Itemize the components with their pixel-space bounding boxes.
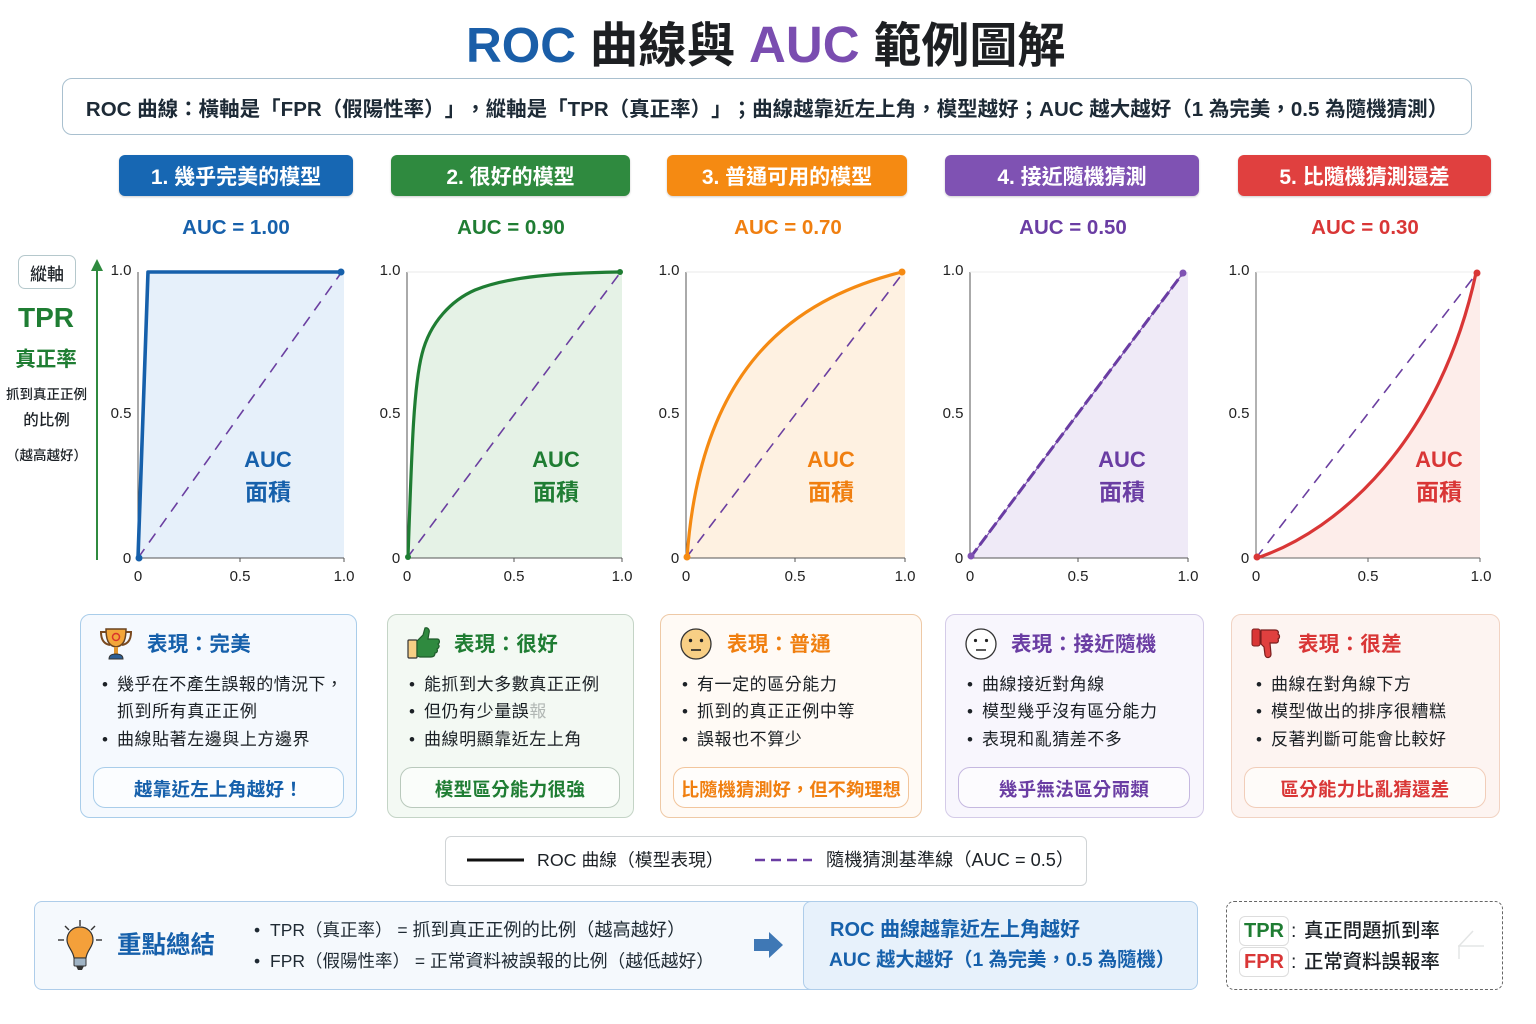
FPR badge: FPR [1244,950,1284,972]
chart 3 [659,262,915,585]
summary heading: 重點總結 [117,932,215,959]
chart 2 [380,262,632,585]
performance bullets 1: • [102,730,108,749]
summary definitions: TPR（真正率） = 抓到真正正例的比例（越高越好） [270,920,685,940]
FPR meaning: 正常資料誤報率 [1304,951,1440,973]
chart 4 [943,262,1198,585]
takeaway 1 [93,767,344,808]
chart 1: 0.5 [111,405,131,422]
TPR note: （越高越好） [6,448,87,463]
performance bullets 2: • [409,730,415,749]
performance bullets 1: 幾乎在不產生誤報的情況下， [117,675,343,694]
chart 5: AUC [1415,447,1463,472]
AUC value 3: AUC = 0.70 [734,216,842,239]
chart 2: 0 [403,568,411,585]
performance bullets 2 [409,675,600,749]
icon: light bulb [58,920,102,970]
legend [445,836,1087,886]
FPR badge [1239,947,1289,977]
performance bullets 1: 抓到所有真正正例 [117,702,257,721]
conclusion box [803,901,1198,990]
TPR meaning: 真正問題抓到率 [1304,920,1440,942]
title: ROC 曲線與 AUC 範例圖解 [466,16,1065,73]
model heading 4: 4. 接近隨機猜測 [997,166,1147,188]
takeaway 3 [673,767,909,808]
performance heading 1: 表現：完美 [147,633,251,656]
performance heading 2: 表現：很好 [454,633,558,656]
panel: worse-than-random model [1231,614,1500,818]
performance bullets 4: • [967,702,973,721]
TPR badge: TPR [1244,920,1284,942]
summary definitions [254,920,714,971]
chart 2: 1.0 [380,262,400,279]
faint arrow mark [1458,930,1484,959]
chart 5: 1.0 [1229,262,1249,279]
takeaway 4: 幾乎無法區分兩類 [999,778,1149,800]
takeaway 2: 模型區分能力很強 [435,778,585,800]
performance bullets 3: 誤報也不算少 [697,730,802,749]
icon: neutral outline face [965,628,997,660]
chart 5: 1.0 [1471,568,1491,585]
TPR label: TPR [18,302,74,333]
takeaway 2 [400,767,620,808]
takeaway 5 [1244,767,1486,808]
performance bullets 5: 曲線在對角線下方 [1271,675,1411,694]
chart 4: 面積 [1099,479,1145,505]
axis tag [18,255,76,289]
panel: near-random model [945,614,1204,818]
panel: perfect model [80,614,357,818]
performance bullets 5: 模型做出的排序很糟糕 [1271,702,1446,721]
chart 4: 0.5 [943,405,963,422]
legend: ROC line [467,858,524,862]
legend: baseline label: 隨機猜測基準線（AUC = 0.5） [826,850,1074,870]
axis tag: 縱軸 [30,264,64,284]
FPR meaning: : [1291,951,1296,973]
TPR description second line: 的比例 [23,412,70,429]
performance bullets 3: • [682,730,688,749]
icon: neutral face [680,628,712,660]
performance bullets 2: 曲線明顯靠近左上角 [424,730,582,749]
performance heading 4: 表現：接近隨機 [1011,633,1157,656]
AUC value 1: AUC = 1.00 [182,216,290,239]
takeaway 3: 比隨機猜測好，但不夠理想 [681,780,901,800]
intro definition box: ROC 曲線：橫軸是「FPR（假陽性率）」，縱軸是「TPR（真正率）」；曲線越靠近左上角，模型越好；AUC 越大越好（1 為完美，0.5 為隨機猜測） [86,98,1448,120]
model heading 1 [119,155,353,196]
performance bullets 1 [102,675,343,749]
panel: good model [387,614,634,818]
arrow [754,932,783,958]
conclusion line 2: AUC 越大越好（1 為完美，0.5 為隨機） [829,950,1175,971]
icon: thumbs down [1252,628,1280,658]
summary definitions: • [254,951,260,971]
takeaway 4 [958,767,1190,808]
takeaway 1: 越靠近左上角越好！ [134,778,303,800]
chart 3: AUC [807,447,855,472]
chart 2: 面積 [533,479,579,505]
performance bullets 5: • [1256,730,1262,749]
model heading 2 [391,155,630,196]
performance heading 3: 表現：普通 [727,633,831,656]
chart 3: 面積 [808,479,854,505]
model heading 5: 5. 比隨機猜測還差 [1279,166,1450,188]
legend: ROC label: ROC 曲線（模型表現） [537,850,724,870]
chart 1: 0 [134,568,142,585]
chart 4: 0 [966,568,974,585]
summary panel [34,901,824,990]
panel: average model [660,614,922,818]
model heading 4 [945,155,1199,196]
model heading 3 [667,155,907,196]
chart 1 [111,262,354,585]
TPR description: 抓到真正正例 [6,387,87,402]
chart 2: AUC [532,447,580,472]
chart 3: 0.5 [785,568,805,585]
performance bullets 5 [1256,675,1446,749]
performance bullets 4: • [967,730,973,749]
performance bullets 4: 模型幾乎沒有區分能力 [982,702,1158,721]
conclusion line 1: ROC 曲線越靠近左上角越好 [830,919,1080,941]
y-axis arrow [91,259,103,560]
y-axis explanation [6,255,103,560]
AUC value 5: AUC = 0.30 [1311,216,1419,239]
intro definition box [62,78,1472,135]
TPR badge [1239,916,1289,946]
chart 4: 1.0 [1178,568,1198,585]
chart 5: 0 [1241,550,1249,567]
glossary box [1226,901,1503,990]
icon: trophy [100,628,132,660]
performance bullets 1: 曲線貼著左邊與上方邊界 [117,730,310,749]
chart 3: 0 [671,550,679,567]
charts [111,262,1491,585]
chart 3: 1.0 [895,568,915,585]
chart 4: 0 [955,550,963,567]
performance bullets 4 [967,675,1158,749]
performance bullets 3: • [682,702,688,721]
performance bullets 2: • [409,675,415,694]
performance bullets 3: 有一定的區分能力 [697,675,837,694]
model heading 1: 1. 幾乎完美的模型 [151,166,321,188]
chart 1: AUC [244,447,292,472]
performance bullets 4: 表現和亂猜差不多 [982,730,1122,749]
chart 1: 1.0 [334,568,354,585]
chart 5: 0.5 [1229,405,1249,422]
chart 2: 0.5 [504,568,524,585]
performance bullets 5: 反著判斷可能會比較好 [1271,730,1446,749]
performance bullets 1: • [102,675,108,694]
AUC value 4: AUC = 0.50 [1019,216,1127,239]
chart 4: 0.5 [1068,568,1088,585]
icon: thumbs up [407,627,440,659]
chart 5: 0 [1252,568,1260,585]
performance bullets 3: • [682,675,688,694]
TPR Chinese name: 真正率 [15,348,77,371]
performance bullets 5: • [1256,702,1262,721]
chart 3: 0 [682,568,690,585]
chart 2: 1.0 [612,568,632,585]
chart 5: 0.5 [1358,568,1378,585]
chart 1: 1.0 [111,262,131,279]
performance bullets 2: • [409,702,415,721]
model heading 2: 2. 很好的模型 [446,166,575,188]
chart 1: 0.5 [230,568,250,585]
chart 4: 1.0 [943,262,963,279]
chart 1: 0 [123,550,131,567]
performance bullets 3: 抓到的真正正例中等 [697,702,855,721]
AUC value 2: AUC = 0.90 [457,216,565,239]
chart 2: 0 [392,550,400,567]
chart 3: 0.5 [659,405,679,422]
TPR meaning: : [1291,920,1296,942]
takeaway 5: 區分能力比亂猜還差 [1280,778,1450,800]
chart 4: AUC [1098,447,1146,472]
chart 3: 1.0 [659,262,679,279]
performance bullets 3 [682,675,855,749]
performance bullets 5: • [1256,675,1262,694]
performance bullets 4: • [967,675,973,694]
chart 1: 面積 [245,479,291,505]
model heading 5 [1238,155,1491,196]
performance bullets 2: 能抓到大多數真正正例 [424,675,600,694]
performance heading 5: 表現：很差 [1298,633,1402,656]
summary definitions: • [254,920,260,940]
performance bullets 2: 但仍有少量誤報 [424,702,547,721]
chart 2: 0.5 [380,405,400,422]
summary definitions: FPR（假陽性率） = 正常資料被誤報的比例（越低越好） [270,951,714,971]
legend: baseline line [755,858,812,862]
chart 5: 面積 [1416,479,1462,505]
model heading 3: 3. 普通可用的模型 [702,166,872,188]
performance bullets 4: 曲線接近對角線 [982,675,1105,694]
chart 5 [1229,262,1491,585]
